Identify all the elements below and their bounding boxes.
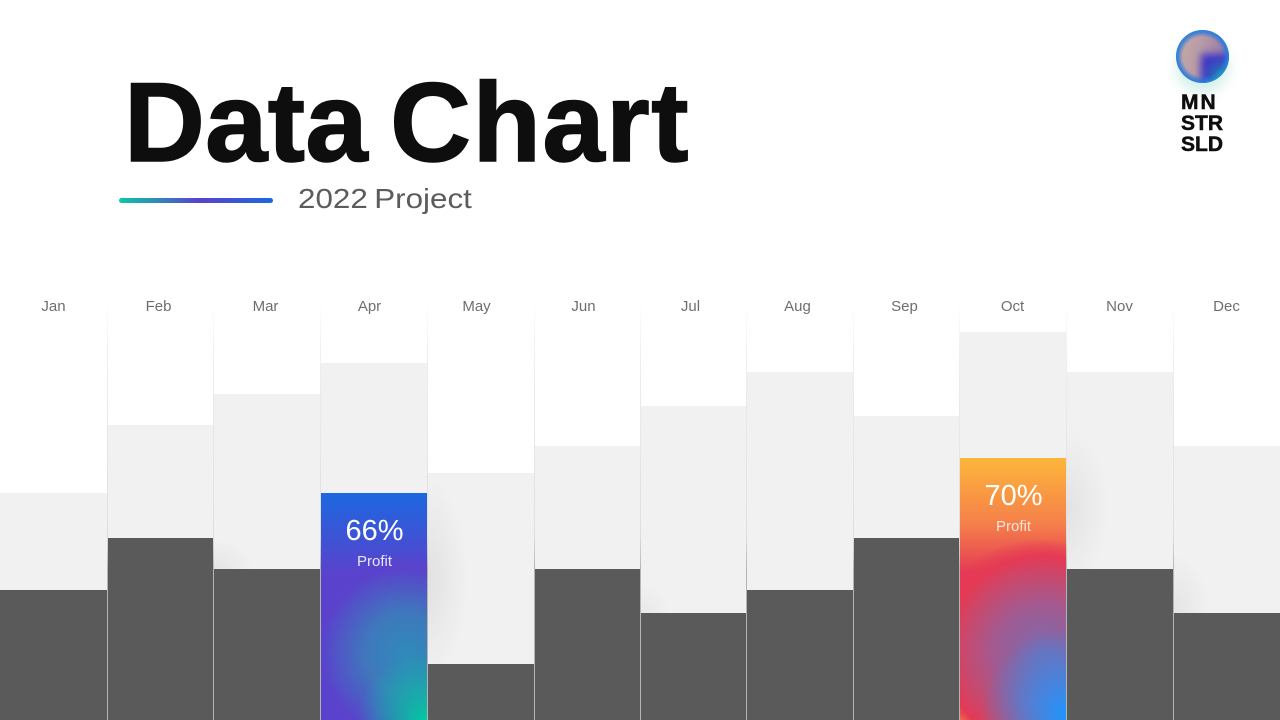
column: Jan xyxy=(0,493,107,720)
label: Apr profit: Profit xyxy=(357,553,392,570)
column: Mar xyxy=(214,394,320,720)
column: Dec xyxy=(1174,446,1280,720)
logo text xyxy=(1181,91,1223,156)
month label: May: May xyxy=(462,298,491,315)
month label: Jun: Jun xyxy=(571,298,596,315)
month label: Nov: Nov xyxy=(1106,298,1133,315)
column: May xyxy=(428,473,534,720)
label: Oct value: 70% xyxy=(984,480,1043,512)
bar: Apr highlight xyxy=(321,493,427,720)
accent line xyxy=(119,198,273,203)
column: Nov xyxy=(1067,372,1173,720)
logo text: SLD xyxy=(1181,133,1223,156)
logo xyxy=(1172,30,1234,156)
month label: Jul: Jul xyxy=(681,298,700,315)
logo text: MN xyxy=(1181,91,1218,114)
month label: Jan: Jan xyxy=(41,298,66,315)
label: Oct profit: Profit xyxy=(996,518,1031,535)
month label: Oct: Oct xyxy=(1001,298,1024,315)
title: Data Chart xyxy=(124,60,690,185)
subtitle: 2022 Project xyxy=(298,183,472,214)
column: Jul xyxy=(641,406,746,720)
chart xyxy=(0,298,1280,720)
column: Sep xyxy=(854,416,959,720)
column: Oct xyxy=(960,332,1066,458)
month label: Sep: Sep xyxy=(891,298,918,315)
month label: Aug: Aug xyxy=(784,298,811,315)
column: Aug xyxy=(747,372,853,720)
month label: Mar: Mar xyxy=(253,298,278,315)
logo text: STR xyxy=(1181,112,1223,135)
icon: gradient sphere xyxy=(1176,30,1229,83)
column: Jun xyxy=(535,446,640,720)
column: Feb xyxy=(108,425,213,720)
month label: Feb: Feb xyxy=(146,298,171,315)
month label: Dec: Dec xyxy=(1213,298,1240,315)
label: Apr value: 66% xyxy=(345,515,404,547)
column: Apr xyxy=(321,363,427,493)
month label: Apr: Apr xyxy=(358,298,381,315)
bar: Oct highlight xyxy=(960,458,1066,720)
